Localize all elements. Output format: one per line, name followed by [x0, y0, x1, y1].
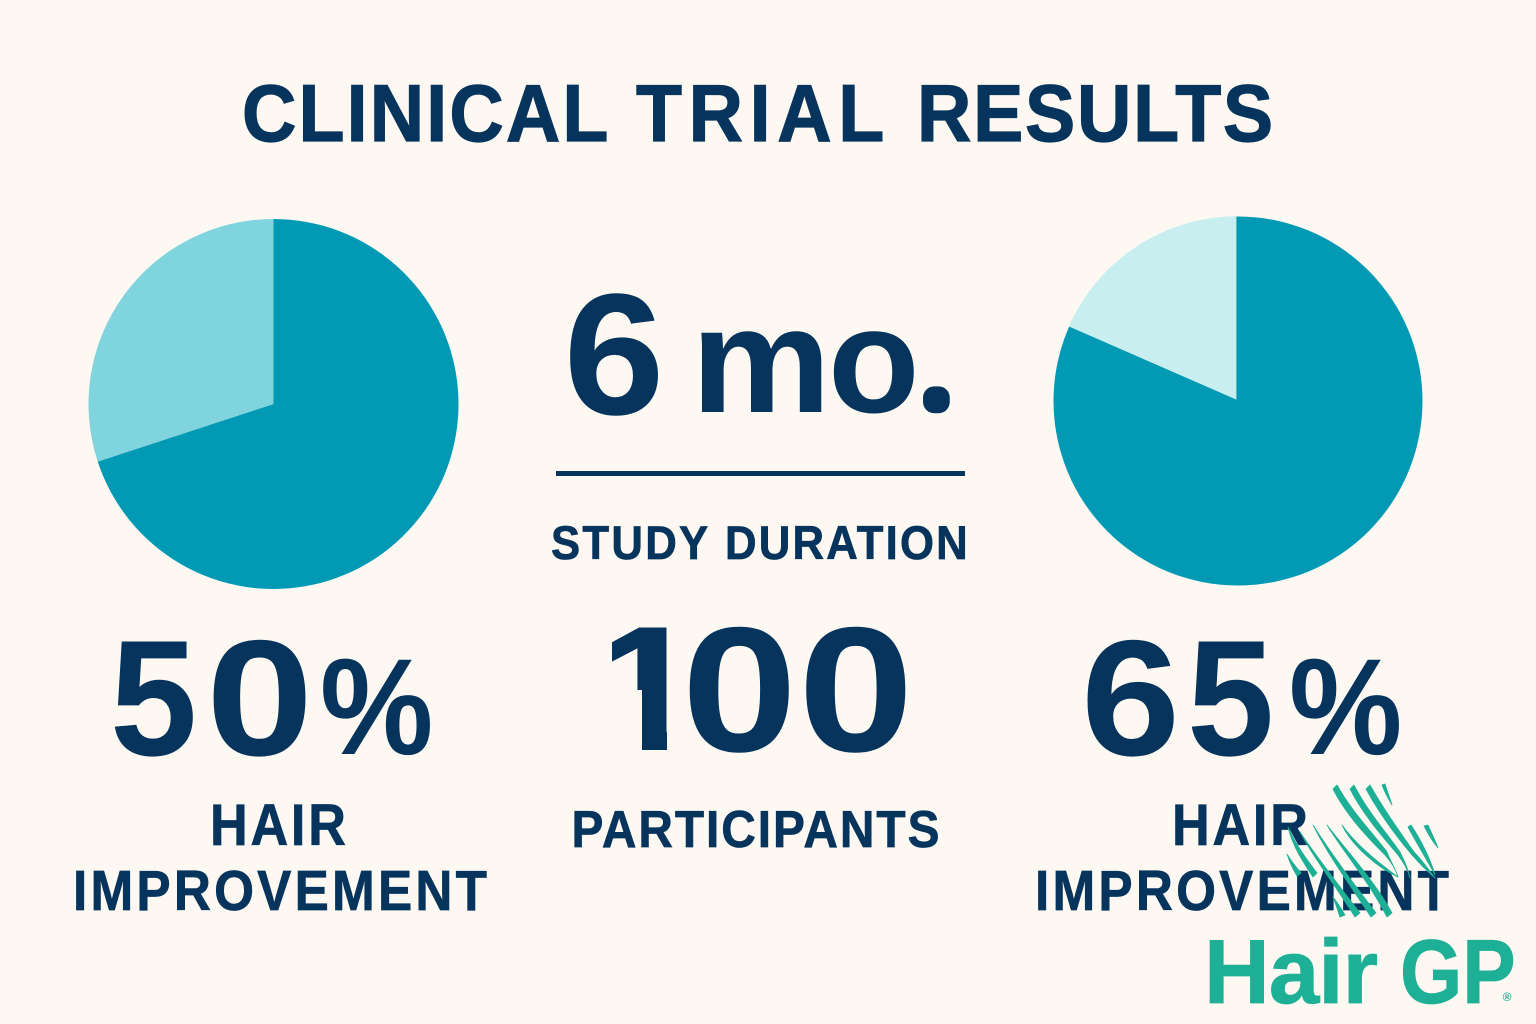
stat: study duration value: [564, 257, 941, 451]
registered mark: ®: [1503, 990, 1512, 1004]
stat: study duration value: .: [932, 376, 941, 409]
stat: study duration value: 6: [564, 257, 665, 451]
label: study duration: DURATION: [725, 517, 968, 569]
divider line: [556, 471, 965, 476]
title: [242, 67, 1273, 159]
logo wordmark: Hair: [1204, 922, 1378, 1023]
label: study duration: [551, 517, 968, 569]
stat: 65%: 6: [1081, 607, 1180, 791]
label: right hair improvement: [1035, 792, 1449, 923]
pie chart: right 65% hair improvement: [1054, 216, 1422, 586]
label: left hair improvement: HAIR: [210, 792, 346, 858]
stat: 65%: 5: [1187, 606, 1274, 791]
icon: hair strands: [1287, 784, 1438, 917]
stat: 50%: %: [320, 631, 433, 784]
title: CLINICAL: [242, 67, 608, 159]
label: left hair improvement: [73, 792, 487, 923]
stat: 65%: [1081, 606, 1402, 791]
label: participants: PARTICIPANTS: [572, 800, 940, 858]
logo wordmark: [1204, 921, 1516, 1023]
stat: 50%: 5: [110, 606, 197, 791]
stat: 100 participants value: 0: [682, 591, 797, 790]
stat: 100 participants value: [612, 626, 906, 753]
pie chart: left 50% hair improvement: [89, 219, 459, 589]
label: study duration: STUDY: [551, 517, 708, 569]
stat: 100 participants value: 1: [588, 590, 706, 788]
stat: study duration value: o: [828, 276, 920, 444]
label: left hair improvement: IMPROVEMENT: [73, 860, 487, 923]
logo wordmark: GP: [1400, 921, 1516, 1023]
label: right hair improvement: IMPROVEMENT: [1035, 860, 1449, 923]
stat: study duration value: m: [691, 276, 831, 444]
stat: 50%: [110, 606, 433, 791]
title: RESULTS: [917, 67, 1273, 159]
label: right hair improvement: HAIR: [1172, 792, 1308, 858]
stat: 100 participants value: 0: [798, 591, 914, 790]
stat: 50%: 0: [206, 606, 313, 791]
stat: 65%: %: [1289, 631, 1402, 784]
title: TRIAL: [636, 67, 884, 159]
logo: Hair GP: [1204, 784, 1516, 1023]
